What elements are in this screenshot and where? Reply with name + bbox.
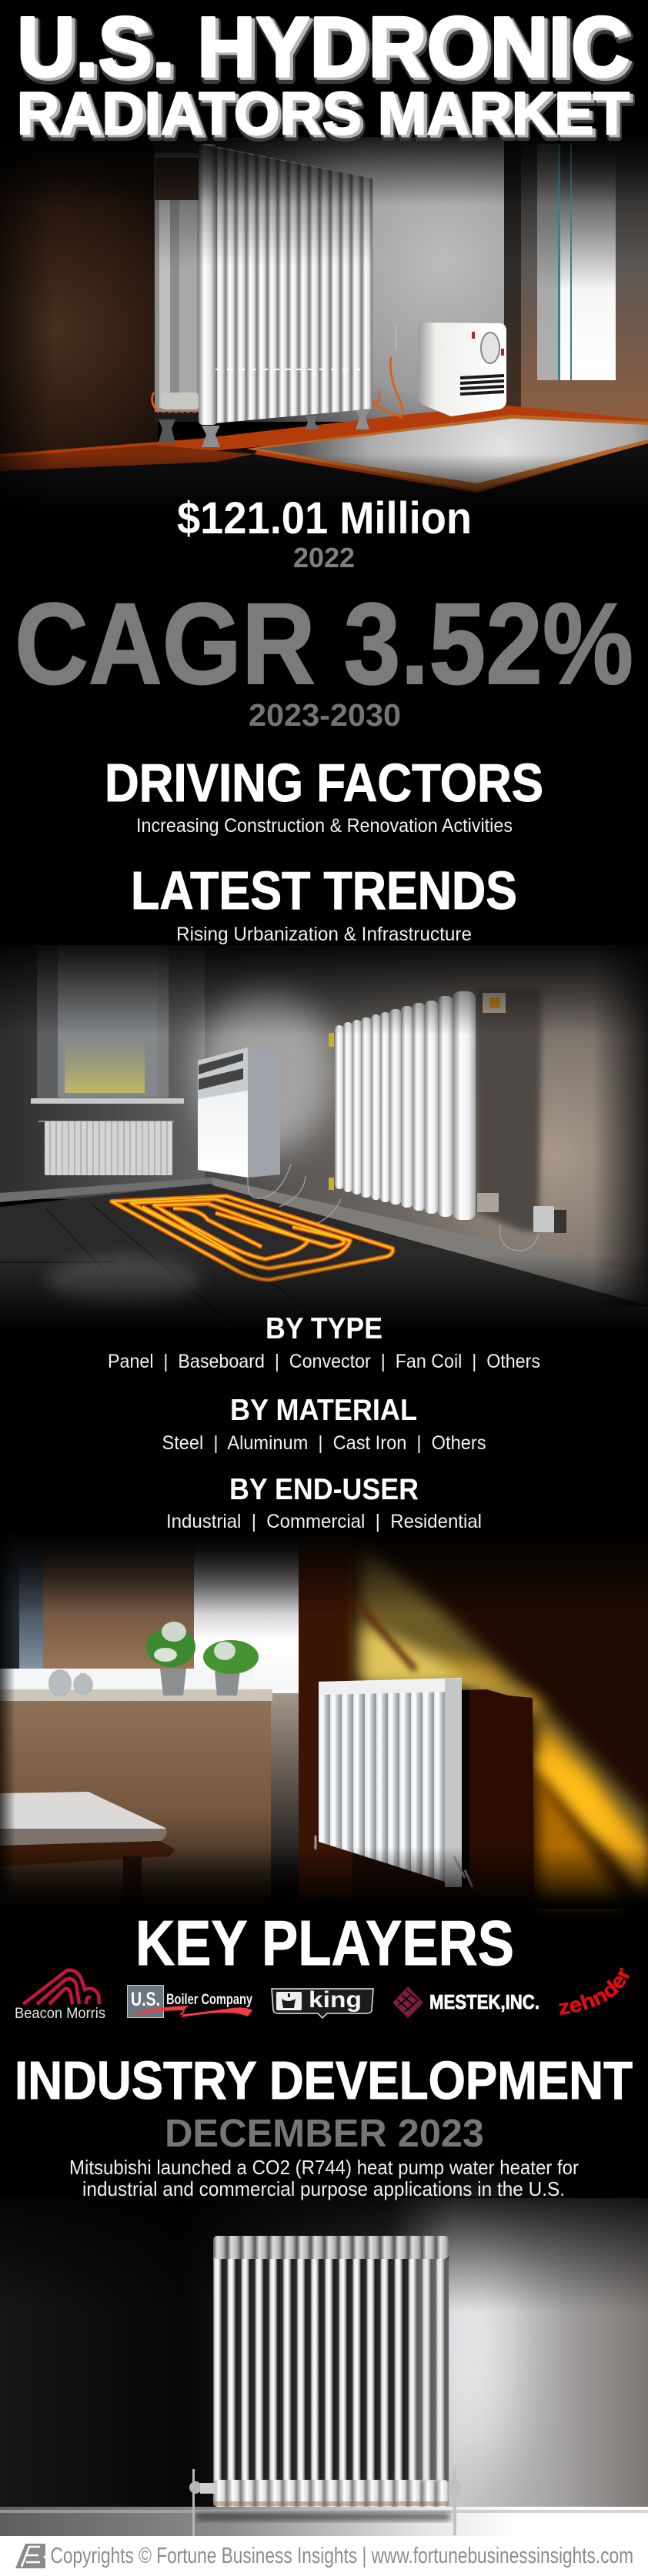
development description: industrial and commercial purpose applications in the U.S. [82,2177,565,2200]
material list: Steel | Aluminum | Cast Iron | Others [162,1432,486,1454]
radiator body [213,2236,449,2507]
heading: key players: KEY PLAYERS [135,1907,514,1979]
left wall and window [0,1532,299,1905]
window [31,945,184,1104]
logo: Beacon Morris: Beacon Morris [15,2006,105,2022]
wall heater [418,322,506,416]
heading: by material: BY MATERIAL [230,1394,417,1427]
segment: by type [108,1312,540,1372]
logo: U.S. Boiler Company: Boiler Company [166,1992,252,2008]
title: U.S. HYDRONIC [17,0,630,95]
floor mat [246,415,648,490]
dark right wall [299,1532,648,1905]
logo: zehnder: zehnder [559,1967,630,2015]
potted plants [146,1622,259,1696]
underfloor heating coil [112,1196,392,1280]
panel radiator [38,1121,174,1175]
valve and orange wires [152,323,402,417]
development description [69,2156,579,2200]
light beams [356,1543,648,1901]
logo: U.S. Boiler Company [128,1986,252,2018]
wall fittings and thermostat [248,993,566,1251]
title [17,0,633,151]
baseboard [0,2507,648,2536]
end-user list: Industrial | Commercial | Residential [166,1511,482,1532]
heading: by end-user: BY END-USER [229,1473,419,1506]
wall shadow [476,988,542,1231]
key player logos [15,1967,630,2022]
back radiator [154,153,199,412]
market size year: 2022 [293,542,355,573]
title: RADIATORS MARKET [20,83,633,151]
title: U.S. HYDRONIC [20,4,633,99]
chair [0,1792,175,1903]
heading: driving factors: DRIVING FACTORS [105,753,543,813]
market size value: $121.01 Million [177,493,472,543]
window [537,144,616,380]
development description: Mitsubishi launched a CO2 (R744) heat pump water heater for [69,2156,579,2179]
driving factors text: Increasing Construction & Renovation Activities [136,815,513,837]
floor [0,407,648,512]
radiator legs [159,410,369,447]
illustration: room with radiators and underfloor heating [0,944,648,1333]
baseboards and floor [0,1183,648,1333]
title: RADIATORS MARKET [20,82,633,149]
radiator shadow [460,1689,534,1903]
title: RADIATORS MARKET [17,79,630,147]
logo: Beacon Morris [15,1970,105,2022]
type list: Panel | Baseboard | Convector | Fan Coil | Others [108,1351,540,1372]
large column radiator [335,991,476,1220]
hero illustration: radiator room [0,135,648,512]
illustration: column radiator on wall [0,2197,648,2536]
development date: DECEMBER 2023 [165,2111,484,2155]
illustration: window corner with sunlit radiator [0,1530,648,1909]
heading: latest trends: LATEST TRENDS [131,860,517,920]
icon: Fortune Business Insights logo [15,2544,45,2568]
vases [48,1669,93,1697]
CAGR period: 2023-2030 [249,697,401,733]
segment: by material [162,1394,486,1454]
logo: king [272,1987,373,2018]
right valve [449,2467,462,2535]
left valve [189,2469,215,2536]
sunlit radiator [316,1678,473,1887]
title: U.S. HYDRONIC [20,2,633,97]
convector unit [198,1047,280,1178]
main radiator [199,144,372,425]
segment: by end-user [166,1473,482,1532]
logo: king: king [309,1987,362,2013]
footer band [0,2536,648,2576]
logo: Mestek, Inc. [392,1986,539,2018]
logo: U.S. Boiler Company: U.S. [131,1989,160,2010]
logo: Mestek, Inc.: MESTEK,INC. [429,1990,539,2013]
latest trends text: Rising Urbanization & Infrastructure [176,924,472,945]
heading: by type: BY TYPE [266,1312,382,1345]
